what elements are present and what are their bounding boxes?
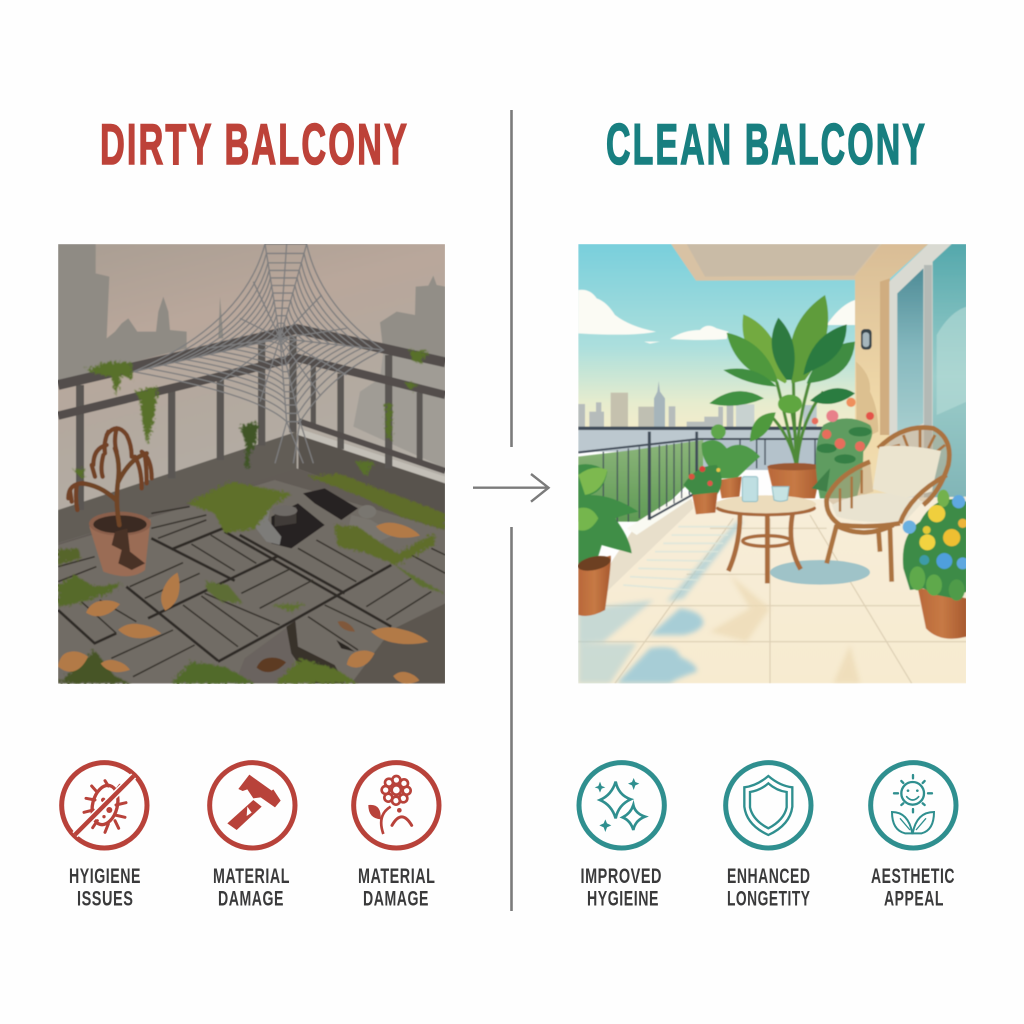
wall lamp: [861, 329, 872, 350]
broken tiles hole: [271, 503, 325, 548]
icon: material damage wilted flower: [354, 763, 439, 848]
glass: [742, 477, 758, 502]
labels: clean balcony benefits: [580, 865, 955, 910]
floor: [578, 497, 967, 683]
tile lines: [578, 515, 967, 683]
crack: [286, 621, 345, 683]
label: enhanced longetity: ENHANCED: [727, 865, 810, 888]
label: material damage: DAMAGE: [218, 888, 284, 910]
label: improved hygiene: HYGIEINE: [587, 888, 659, 910]
label: hygiene issues: [69, 865, 141, 910]
wicker chair: [826, 427, 949, 582]
label: improved hygiene: [580, 865, 662, 910]
plant shadow on wall: [856, 362, 878, 442]
panel: clean balcony illustration: [576, 244, 969, 683]
arrow: dirty to clean: [473, 474, 548, 502]
infographic canvas: [58, 110, 966, 911]
dead potted plant: [68, 428, 152, 576]
sky: [58, 244, 445, 510]
panel: dirty balcony illustration: [55, 244, 445, 686]
icon: enhanced longevity shield: [726, 763, 811, 848]
railing: [578, 428, 823, 532]
icon: hygiene issues bug: [62, 763, 147, 848]
label: aesthetic appeal: APPEAL: [884, 888, 944, 910]
floor tiles: [55, 473, 445, 686]
round table: [716, 477, 816, 583]
window frame and glass: [888, 244, 952, 498]
label: material damage: MATERIAL: [213, 865, 290, 888]
distant skyline: [578, 381, 817, 428]
dead leaves: [55, 519, 430, 686]
low parapet: [608, 498, 693, 590]
label: enhanced longetity: LONGETITY: [727, 888, 810, 910]
hazy skyline: [58, 244, 445, 468]
cup: [772, 487, 789, 501]
center divider bottom: [510, 527, 513, 911]
rose bush: [812, 398, 874, 498]
icon row: dirty balcony problems: [62, 763, 439, 848]
icon: material damage hammer: [210, 763, 295, 848]
left potted plant: [576, 464, 638, 616]
banana plant: [709, 295, 855, 498]
label: material damage second: [358, 865, 436, 910]
label: material damage second: DAMAGE: [363, 888, 429, 910]
small flower pot: [683, 465, 722, 514]
label: enhanced longetity: [727, 865, 810, 910]
wall: [855, 244, 928, 512]
label: hygiene issues: ISSUES: [77, 888, 134, 910]
label: improved hygiene: IMPROVED: [580, 865, 662, 888]
right flower pot: [903, 490, 969, 639]
label: material damage second: MATERIAL: [358, 865, 436, 888]
title: dirty balcony: DIRTY BALCONY: [100, 113, 409, 177]
label: aesthetic appeal: AESTHETIC: [871, 865, 955, 888]
table shadow: [770, 560, 870, 585]
sky: [578, 244, 928, 428]
railing posts: [76, 336, 423, 510]
rail shadows and reflections: [578, 522, 743, 683]
railing bars: [58, 329, 445, 471]
ceiling: [671, 244, 882, 281]
small leafy plant: [702, 424, 760, 498]
spider web: [133, 244, 383, 463]
label: aesthetic appeal: [871, 865, 955, 910]
label: hygiene issues: HYIGIENE: [69, 865, 141, 888]
label: material damage: [213, 865, 290, 910]
icon row: clean balcony benefits: [579, 763, 956, 848]
parapet and floor base: [58, 468, 445, 683]
icon: improved hygiene sparkles: [579, 763, 664, 848]
moss: [58, 473, 445, 683]
center divider top: [510, 110, 513, 447]
moss on rails: [73, 350, 429, 480]
clouds: [578, 290, 855, 344]
labels: dirty balcony problems: [69, 865, 436, 910]
icon: aesthetic appeal sun flower: [871, 763, 956, 848]
